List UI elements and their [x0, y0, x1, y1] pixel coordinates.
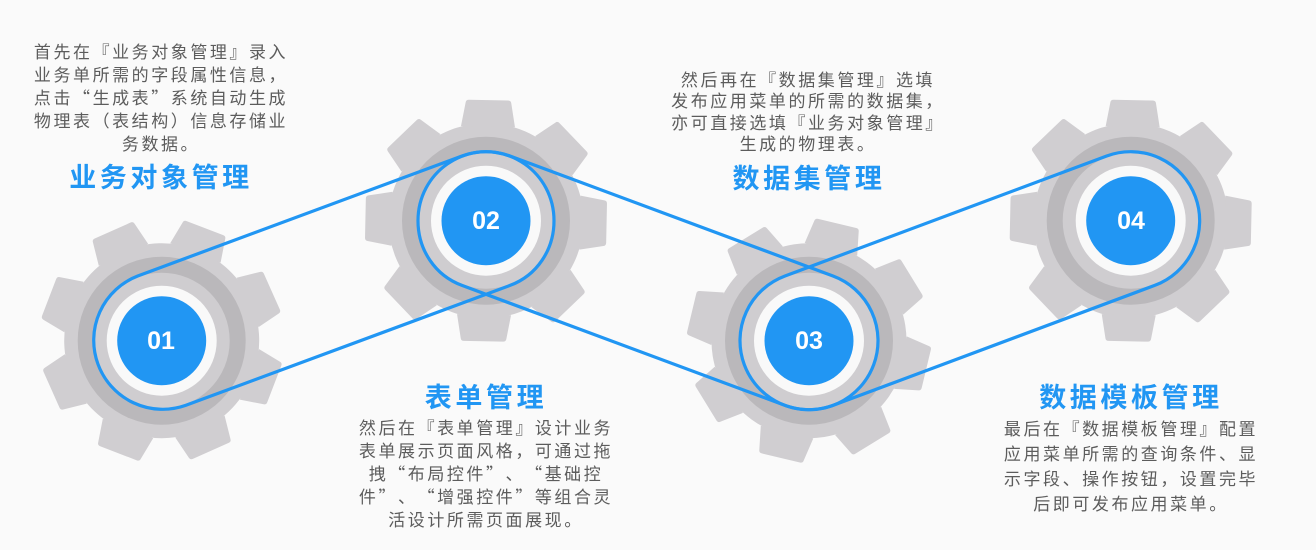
text block: step 2 description: 表单展示页面风格，可通过拖 [359, 436, 613, 462]
heading: step 2: 表单管理 [425, 376, 547, 414]
number 02: 02 [472, 207, 500, 235]
gear 02 [363, 98, 609, 344]
text block: step 3 description: 发布应用菜单的所需的数据集， [671, 87, 945, 112]
text block: step 1 description [34, 38, 288, 154]
text block: step 2 description: 拽“布局控件”、“基础控 [369, 460, 603, 484]
text block: step 4 description: 应用菜单所需的查询条件、显 [1004, 440, 1258, 465]
text block: step 2 description: 件”、“增强控件”等组合灵 [359, 482, 613, 508]
text block: step 3 description [671, 66, 945, 155]
number 01: 01 [147, 327, 175, 355]
text block: step 2 description: 然后在『表单管理』设计业务 [359, 414, 613, 438]
heading: step 4: 数据模板管理 [1039, 376, 1223, 414]
gear 01 [6, 185, 318, 497]
number 04: 04 [1117, 207, 1145, 235]
text block: step 1 description: 物理表（表结构）信息存储业 [34, 106, 288, 132]
text block: step 4 description: 示字段、操作按钮，设置完毕 [1004, 465, 1258, 490]
text block: step 2 description [359, 414, 613, 530]
text block: step 1 description: 点击“生成表”系统自动生成 [34, 84, 288, 108]
text block: step 1 description: 首先在『业务对象管理』录入 [34, 38, 288, 62]
text block: step 4 description [1004, 414, 1258, 515]
gear 04 [1008, 98, 1254, 344]
number 03: 03 [795, 327, 823, 355]
heading: step 1: 业务对象管理 [69, 156, 253, 194]
belts linking the gears [94, 152, 1200, 410]
heading: step 3: 数据集管理 [732, 156, 886, 196]
text block: step 2 description: 活设计所需页面展现。 [388, 506, 584, 530]
text block: step 3 description: 然后再在『数据集管理』选填 [681, 66, 935, 91]
text block: step 4 description: 最后在『数据模板管理』配置 [1004, 414, 1258, 440]
gear 03 [664, 195, 954, 486]
text block: step 3 description: 亦可直接选填『业务对象管理』 [671, 109, 945, 134]
text block: step 1 description: 业务单所需的字段属性信息， [34, 60, 288, 86]
text block: step 4 description: 后即可发布应用菜单。 [1033, 490, 1229, 515]
text block: step 1 description: 务数据。 [122, 130, 200, 154]
text block: step 3 description: 生成的物理表。 [740, 130, 876, 155]
